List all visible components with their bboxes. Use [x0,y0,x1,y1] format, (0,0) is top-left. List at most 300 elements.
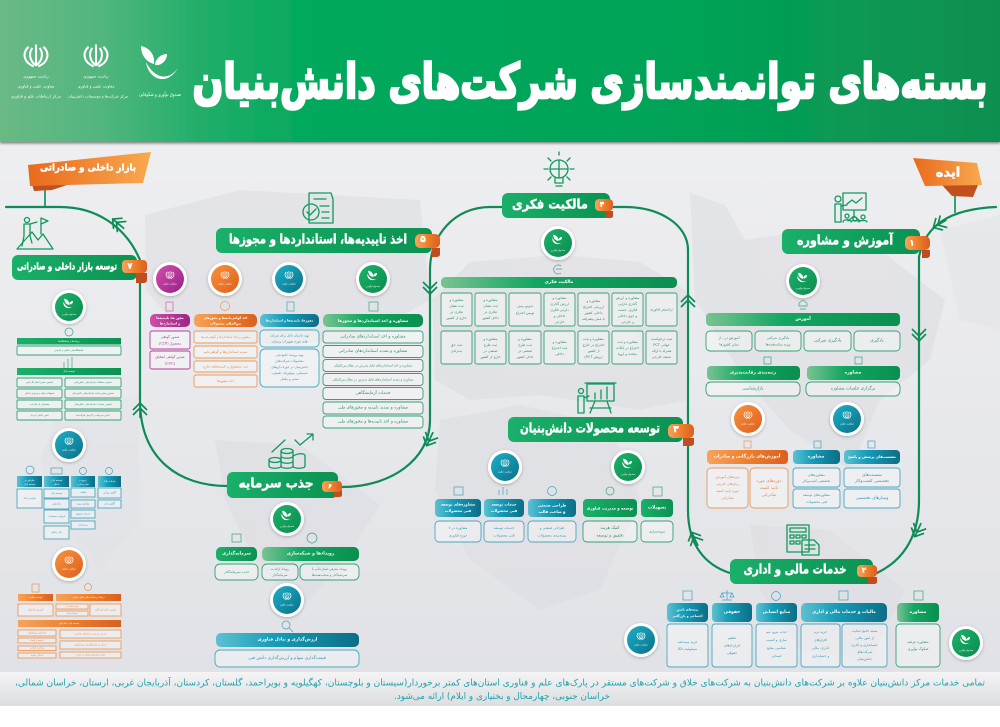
sub-panel: blue services: خدمات بازار [102,480,116,483]
sub-panel: training: یادگیری شرکتی [814,338,842,344]
sub-panel: development services: فنی محصولات [491,509,518,513]
sub-panel: blue services: آگاهی بازار [103,502,115,506]
sub-panel: human resources: سازی و آسیب [766,638,787,642]
sub-panel: industrial design: بسته‌بندی محصولات [537,534,567,538]
sub-panel: sessions, consulting, trade training: مشاوره‌های توسعه [803,493,830,497]
grid: services row 1: دارایی فکری [550,308,569,312]
sub-panel: sessions, consulting, trade training: وبینارهای تخصصی [856,496,888,501]
sub-panel: technology development: توسعه و مدیریت فناوری [587,506,634,510]
sub-panel: orange export services: بازاریابی بین‌المللی [28,632,47,634]
sub-panel: development consulting [435,487,481,542]
sub-panel: human resources [756,592,797,667]
sub-panel: orange export services: ارسال نمونه [31,654,43,657]
sub-panel: sessions, consulting, trade training: مشاوره‌های [808,473,825,477]
sub-panel: sessions, consulting, trade training: صادراتی [762,492,777,498]
sub-panel: standards blue [260,302,319,387]
grid: services row 1: گذاری دارایی [618,301,637,306]
sub-panel: sessions, consulting, trade training: دوره‌های مورد [756,478,782,484]
grid: services row 1: داخلی و [553,314,566,318]
sub-panel: insurance: بیمه‌های تامین [677,608,698,612]
grid: services row 1: داخل کشور [481,316,499,320]
sub-panel: consulting and competitiveness: برگزاری جلسات مشاوره [831,386,875,392]
sub-panel: tax and financial services: اداری، مالی [812,646,829,650]
sub-panel: sessions, consulting, trade training: تخصصی کسب‌وکار [854,478,890,484]
sub-panel: standards consulting [323,302,423,428]
circle: fund logo: صندوق نوآوری [796,286,810,290]
circle: government logo blue [52,428,86,462]
sub-panel: development services: خدمات توسعه [494,526,514,530]
circle: fund logo: صندوق نوآوری [551,248,565,252]
sub-panel: valuation and technology exchange: ارزش‌گذاری و تبادل فناوری [258,636,318,642]
grid: services row 1: خارج از کشور [445,316,467,320]
sub-panel: legal [712,590,752,667]
sub-panel: sessions, consulting, trade training: تخصصی کسب‌وکار [802,479,830,483]
grid: services row 2: داخلی [555,352,564,356]
sub-panel: insurance: اجتماعی و بازرگانی [672,614,703,618]
icon: presentation [835,193,867,222]
sub-panel: sessions, consulting, trade training: آموزش‌های بازرگانی و صادرات [714,454,781,460]
sub-panel: events and networking: رویدادها و شبکه‌سازی [287,550,335,556]
grid: services row 1: با عمل پیشرفته [582,317,605,321]
banner: domestic and export market [28,152,151,207]
sub-panel: development consulting: حوزه فناوری [449,534,467,538]
sub-panel: tax and financial services: و حسابداری [812,654,829,658]
sub-panel: human resources: منابع انسانی [763,610,791,615]
sub-panel: certificates orange: مشاوره و اخذ استانداردها و گواهی‌نامه‌ها [201,335,250,339]
world map background [40,190,1000,660]
sub-panel: standards blue: مجوزها، تاییدیه‌ها و استانداردها [266,318,313,322]
sub-panel: tax and financial services: شرکت‌های [857,650,872,654]
sub-panel: insurance: خرید بیمه‌نامه [678,640,697,644]
heading 5 [216,228,440,257]
sub-panel: standards blue: دانش‌بنیان در حوزه داروهای [271,365,308,369]
sub-panel: market development: تامین اعتبار خریدار [29,414,49,417]
sub-panel: certificates orange: تمدید استانداردها و گواهی‌نامه [204,349,247,354]
sub-panel: facilities: تسهیلات [648,506,667,510]
sub-panel: tax and financial services [801,591,887,667]
logo: innovation fund [139,46,181,98]
sub-panel: blue services: توسعه بازار [50,492,63,495]
heading 7: ۷ [128,262,133,270]
sub-panel: development services [484,487,524,542]
grid: services row 1: مشاوره و [448,298,464,302]
sub-panel: orange export services: توسعه مهارت [29,596,43,599]
sub-panel: certificates magenta: صدور گواهی انطباق [155,354,185,359]
sub-panel: valuation and technology exchange: قیمت‌گذاری سهام و ارزش‌گذاری دانش فنی [248,655,326,661]
sub-panel: human resources: انسانی [771,654,782,658]
heading 4: ۴ [600,200,605,208]
sub-panel: market development: تسهیلات تولید و فروش داخلی [25,392,55,395]
sub-panel: consulting and competitiveness: مشاوره [845,370,862,376]
sub-panel: orange export services: آموزش کارکنان [28,608,44,612]
sub-panel: consulting: مشاوره عرضه [907,640,929,644]
panel: 7 domestic and export market development [12,218,147,658]
sub-panel: legal: قراردادهای [724,644,740,648]
grid: services row 1: نویس اختراع [516,311,534,315]
grid: services row 2: ثبت حق [451,343,462,347]
grid: services row 1: و جوی داخلی [618,314,638,318]
icon: chart presentation [578,383,616,413]
sub-panel: training: سایر کشورها [719,342,739,346]
sub-panel: orange export services: اعزام به نمایشگاه‌های بین‌المللی [74,642,107,646]
sub-panel: standards consulting: خدمات آزمایشگاهی [355,390,391,396]
sub-panel: market development: تامین سرمایه در گردش شرکت‌ها [76,413,110,417]
sub-panel: orange export services: بیمه صادرات [66,605,79,608]
sub-panel: standards blue: های حوزه تجهیزات پزشکی [272,340,308,344]
sub-panel: events and networking: سرمایه‌گذار و شتاب‌دهنده‌ها [312,573,348,577]
circles: logos: معاونت علمی [498,470,513,474]
grid: services row 2: جهانی PCT [653,343,670,347]
grid: services row 2: ثبت درخواست [651,337,672,341]
sub-panel: sessions, consulting, trade training: صادراتی [721,496,734,500]
logo: vice presidency center [68,44,128,98]
heading 6 [227,472,342,498]
sub-panel: market development: تضمین پیش‌پرداخت شرکت‌های دانش‌بنیان [72,392,114,395]
sub-panel: investment [215,534,258,580]
sub-panel: consulting: مشاوره [910,610,927,615]
sub-panel: facilities [641,487,673,542]
sub-panel: sessions, consulting, trade training: مورد تایید کمیته [716,489,739,493]
grid: services row 1: مشاوره و [482,298,498,302]
heading 3: ۳ [673,425,679,435]
sub-panel: standards consulting: مشاوره و تمدید استانداردهای قابل پذیرش در نظام بین‌المللی [333,378,414,382]
sub-panel: human resources: جذب نیرو، تیم [766,630,787,634]
grid: services row 1: مشاوره و [551,296,567,300]
footer note [0,672,1000,706]
grid: services row 2: اختراع در خارج [583,343,604,347]
circle: fund logo: صندوق نوآوری [959,648,973,652]
sub-panel: tax and financial services: دانش‌بنیان [857,657,872,661]
sub-panel: tax and financial services: بسته جامع حمایت [852,629,877,633]
grid: services row 1: خارجی [554,320,565,324]
sub-panel: tax and financial services: خرید نرم [814,630,827,635]
sub-panel: insurance [667,591,708,667]
sub-panel: events and networking [262,533,359,580]
sub-panel: certificates orange [194,302,257,387]
circle: fund logo [52,290,86,324]
sub-panel: tax and financial services: مالیات و خدمات مالی و اداری [812,610,876,615]
circles: logos: معاونت علمی [282,282,297,286]
circle: fund logo [949,626,983,660]
sub-panel: certificates orange: بین‌المللی محصولات [210,322,241,326]
circle: fund logo: صندوق نوآوری [280,524,294,528]
sub-panel: blue services: توسعه بازار [50,478,63,482]
sub-panel: training: یادگیری شرکتی [767,335,789,340]
sub-panel: training: ویژه شتابدهنده‌ها [766,342,791,346]
sub-panel: events and exhibitions: رویدادها و نمایشگاه‌ها [58,339,81,343]
icon: calculator and invoice [787,525,819,555]
sub-panel: blue services: فروش محصولات [48,515,65,518]
sub-panel: certificates magenta: مجوز ها، تاییدیه‌ها [156,316,184,320]
grid: services row 2: مشاوره و [482,337,498,341]
heading 5: ۵ [420,235,426,245]
banner: domestic and export market: بازار داخلی و صادراتی [40,162,136,174]
sub-panel: certificates orange: ثبت محصول و تاییدیه‌های خارج [203,364,248,368]
grid: services row 2: ثبت اختراع [552,346,567,350]
sub-panel: events and exhibitions [17,328,121,355]
logo: vice presidency: ریاست جمهوری [23,74,49,78]
circles: government logos: معاونت علمی [741,422,756,426]
sub-panel: orange export services: ترجمه و اسناد [30,639,44,642]
sub-panel: development consulting: مشاوره در ۷ [449,526,467,530]
circles: logos: صندوق نوآوری [366,284,380,288]
sub-panel: blue services [17,466,121,539]
icon: coins and arrow [269,434,313,468]
sub-panel: development consulting: فنی محصولات [445,509,472,513]
logo: vice presidency center: ریاست جمهوری [83,74,109,78]
panel: 2 financial and administrative services [624,525,983,667]
sub-panel: certificates magenta [150,302,190,369]
circle: government logo [624,623,658,657]
sub-panel: training: آموزش در - از [717,336,741,340]
sub-panel: standards blue: تهیه پرونده جامع فنی [276,353,304,357]
heading 6: جذب سرمایه [238,476,314,492]
sub-panel: market development: تضمین حسن انجام کار فنی [26,381,53,384]
sub-panel: consulting and competitiveness: بازارشناسی [742,386,764,392]
sub-panel: standards blue: سنتی و مکمل [280,377,299,381]
grid: services row 2: اختراع در ایالات [616,346,639,350]
icon: certified document [303,193,333,223]
logo: vice presidency center: معاونت علمی و فناوری [78,84,114,88]
sub-panel: industrial design: و ساخت قالب [539,508,566,514]
circle: fund logo [541,226,575,274]
sub-panel: sessions, consulting, trade training: نشست‌های [862,472,882,478]
logo: vice presidency center: مرکز شرکت‌ها و موسسات دانش‌بنیان [68,94,128,98]
heading 4 [502,193,613,218]
heading 7: توسعه بازار داخلی و صادراتی [17,262,117,272]
sub-panel: sessions, consulting, trade training: دوره‌های آموزش [715,475,740,479]
sub-panel: orange export services: مشاوره تجاری [30,647,45,650]
grid: services row 1: ارزیابی اختراع [583,305,604,309]
sub-panel: blue services: بازار داخلی [51,531,62,534]
grid: services row 2: داخل کشور [516,355,534,359]
sub-panel: tax and financial services: افزارهای [814,638,827,642]
sub-panel: development services: خدمات توسعه [491,502,517,506]
intellectual property bar [441,277,677,288]
sub-panel: human resources: شناسی منابع [767,646,786,650]
grid: services row 2: صنعتی در [517,349,532,353]
sub-panel: consulting: صکوک نوآوری [908,646,928,651]
sub-panel: training [706,300,900,351]
grid: services row 1: ثبت نشان [449,304,464,308]
grid: services row 2 [441,331,677,364]
sub-panel: consulting [896,591,940,667]
sub-panel: standards consulting: مشاوره و اخذ استانداردهای صادراتی [340,334,406,340]
circle: government logo: معاونت علمی [280,604,295,606]
sub-panel: development services: فنی محصولات [493,534,515,538]
sub-panel: industrial design [528,486,576,542]
sub-panel: blue services: طراحی بازار [22,497,36,500]
sub-panel: standards blue: تهیه داستان قابل برای شرکت [270,334,309,338]
grid: services row 2: (روش PCT) [584,355,603,359]
sub-panel: orange export services: ضمانت‌نامه [66,612,78,615]
sub-panel: industrial design: طراحی صنعتی [538,502,567,507]
circles: logos [488,450,645,484]
grid: services row 2: همراه با ارائه [652,349,671,353]
sub-panel: market development [17,357,121,420]
sub-panel: facilities: نمونه‌سازی [649,530,665,534]
sub-panel: orange export services: تضمین مالی بازرگانی [95,608,116,612]
sub-panel: insurance: مسئولیت IDI [678,647,697,651]
footer note: تمامی خدمات مرکز دانش‌بنیان علاوه بر شرکت‌های دانش‌بنیان به شرکت‌های خلاق و شرکت‌های مستقر در پارک‌های علم و فناوری استان‌های کمتر برخوردار(سیستان و بلوچستان، کهگیلویه و بویراحمد، گلستان، کردستان، آذربایجان غربی، ارستان، خراسان شمالی، [15,676,985,688]
circle: fund logo [786,264,820,298]
sub-panel: market development: پشتیبانی از صادرات [30,403,50,406]
grid: services row 1: تدوین پیش [517,304,533,308]
circles: government logos: معاونت علمی [840,422,855,426]
grid: services row 2: به‌نژادی [451,349,462,353]
sub-panel: market development: تضمین معاملات شرکت‌های دانش‌بنیان [74,381,112,384]
sub-panel: standards consulting: مشاوره و تمدید تاییدیه و مجوزهای ملی [338,406,408,410]
panel: 3 product development [435,383,694,542]
heading 2: خدمات مالی و اداری [744,562,846,578]
sub-panel: blue services: طراحی و [24,478,34,482]
sub-panel: certificates magenta: (COC) [165,362,176,366]
grid: services row 1: تجاری در [449,310,463,314]
heading 1: ۱ [910,238,914,248]
circle: government logo orange [52,547,86,581]
sub-panel: blue services: داخلی [54,482,60,486]
logo: vice presidency: مرکز ارتباطات علم و فناوری [11,94,61,98]
sub-panel: sessions, consulting, trade training: مشاوره [808,454,825,460]
heading 1 [782,229,930,258]
sub-panel: consulting and competitiveness: رتبه‌بندی رقابت‌پذیری [730,370,777,376]
sub-panel: certificates magenta: و استانداردها [160,322,180,326]
sub-panel: blue services: خدمات فروش [76,512,91,516]
panel: 1 training and consulting [706,193,930,508]
sub-panel: certificates orange: اخذ گواهی‌نامه‌ها و مجوزهای [204,316,247,320]
heading 5: اخذ تاییدیه‌ها، استانداردها و مجوزها [229,232,407,248]
logo: vice presidency [11,44,61,98]
arrows along path [108,214,950,549]
sub-panel: investment: سرمایه‌گذاری [222,550,251,556]
panel: 5 approvals, standards and licenses [150,193,440,428]
sub-panel: events and networking: رویداد معرفی استارت‌آپ با [312,567,347,571]
sub-panel: blue services: توسعه بازار [23,482,36,486]
sub-panel: blue services: برندسازی [78,524,88,526]
sub-panel: blue services: تجاری‌سازی [77,482,89,486]
panel: 6 attracting investment [215,434,359,667]
sub-panel: standards blue: شیمیایی، بیولوژیک، طبیعی، [271,371,308,375]
grid: services row 1 [441,293,677,326]
grid: services row 2: متحده و اروپا [618,352,637,356]
sub-panel: market development: تضمین صادرات شرکت‌های دانش‌بنیان [74,403,112,406]
sub-panel: industrial design: طراحی صنعتی و [539,526,564,530]
sub-panel: events and exhibitions: نمایشگاه‌های داخلی و خارجی [54,348,84,352]
sub-panel: certificates magenta: صدور گواهی [161,334,179,339]
sub-panel: certificates magenta: محصول (CCP) [159,342,181,346]
banner: idea [913,158,982,213]
circle: government logo orange: معاونت علمی [62,568,77,570]
sub-panel: tax and financial services: حسابداری و اداری [851,643,878,647]
grid: services row 2: از کشور [586,349,600,353]
circle: government logo [270,583,304,617]
grid: services row 1: فکری، جست [618,308,637,312]
circles: logos: صندوق نوآوری [621,472,635,476]
sub-panel: standards consulting: مشاوره و تمدید استانداردهای صادراتی [339,349,407,354]
heading 2: ۲ [862,566,867,574]
grid: services row 1: تجاری در [483,310,497,314]
grid: services row 2: مشاوره و ثبت [617,340,638,344]
grid: services row 1: ارزش گذاری [550,301,569,306]
sub-panel: orange export services [18,584,121,658]
heading 1: آموزش و مشاوره [797,232,893,248]
sub-panel: certificates orange: اخذ مجوزها [217,379,234,383]
grid: services row 2: مشاوره و ثبت [583,337,604,341]
sub-panel: blue services: تبلیغات [79,491,87,494]
sub-panel: legal: تنظیم [728,636,736,640]
heading 3: توسعه محصولات دانش‌بنیان [520,422,660,436]
sub-panel: blue services: ترویج و [78,478,87,482]
header band [0,0,1000,142]
main flow path [6,207,996,573]
circles: government logos [731,402,864,436]
sub-panel: standards consulting: مشاوره و اخذ استانداردها و مجوزها [338,318,409,323]
sub-panel: development consulting: مشاوره‌های توسعه [441,502,476,506]
heading 7 [12,255,147,283]
logo: vice presidency: معاونت علمی و فناوری [18,84,54,88]
circle: government logo: معاونت علمی [634,644,649,646]
grid: services row 2: ثبت طرح [518,343,532,347]
sub-panel: valuation and technology exchange [215,621,359,667]
sub-panel: sessions, consulting, trade training: فنی محصولات [806,500,827,504]
sub-panel: blue services: آگاهی تجاری [103,490,116,494]
panel: 4 intellectual property [441,152,677,364]
footer note: خراسان جنوبی، چهارمحال و بختیاری و ایلام) ارائه می‌شود. [394,692,610,702]
grid: services row 2: مشاوره و [551,340,567,344]
sub-panel: technology development: تحقیق و توسعه [596,533,624,538]
grid: services row 2: خارج از کشور [479,355,501,359]
circles: logos [153,262,390,296]
icon: light bulb [544,152,574,186]
grid: services row 1: و خارجی [621,320,634,324]
sub-panel: orange export services: ریسک و ضمانت‌های مالی تجاری [72,596,105,599]
sub-panel: training: آموزش [795,316,811,322]
grid: services row 1: ثبت نشان [483,304,498,308]
circle: government logo blue: معاونت علمی [62,448,77,452]
grid: services row 2: نسخه خارجی [652,355,671,359]
sub-panel: standards blue: محصولات شرکت‌های [275,359,304,363]
logo: innovation fund: صندوق نوآوری و شکوفایی [139,91,181,98]
circles: logos: معاونت علمی [218,282,233,286]
circle: fund logo [270,502,304,536]
sub-panel: standards consulting: مشاوره و اخذ استانداردهای قابل پذیرش در نظام بین‌المللی [334,364,413,368]
sub-panel: blue services: بازاریابی [52,502,61,506]
grid: services row 1: مشاوره و [585,299,601,303]
banner: idea: ایده [936,166,960,180]
sub-panel: consulting and competitiveness [706,357,900,396]
sub-panel: training: یادگیری [870,338,885,344]
grid: services row 2: ثبت طرح [484,343,497,347]
heading 3 [508,417,694,446]
sub-panel: events and networking: سرمایه‌گذار [272,573,288,577]
grid: services row 1: مشاوره و ارزش [616,296,640,300]
grid: services row 2: صنعتی در [482,349,498,353]
sub-panel: sessions, consulting, trade training: نشست‌های پرسش و پاسخ [848,455,897,459]
sub-panel: orange export services: تجارت‌خانه‌های ایران در خارج [76,654,105,656]
sub-panel: tax and financial services: از امور مالی، [855,636,874,640]
heading 6: ۶ [328,483,332,490]
sub-panel: legal: حقوقی [727,651,737,655]
sub-panel: orange export services: توسعه بازار صادراتی [59,622,80,625]
sub-panel: sessions, consulting, trade training: زبان‌های خارجی [716,482,739,486]
heading 4: مالکیت فکری [512,198,588,212]
circles: logos: معاونت علمی [163,282,178,286]
sub-panel: investment: جذب سرمایه‌گذار [223,569,249,574]
heading 2 [730,559,877,584]
sub-panel: market development: توسعه بازار [62,370,75,373]
circle: fund logo: صندوق نوآوری [62,312,76,316]
icon: climber and flag [17,218,53,249]
